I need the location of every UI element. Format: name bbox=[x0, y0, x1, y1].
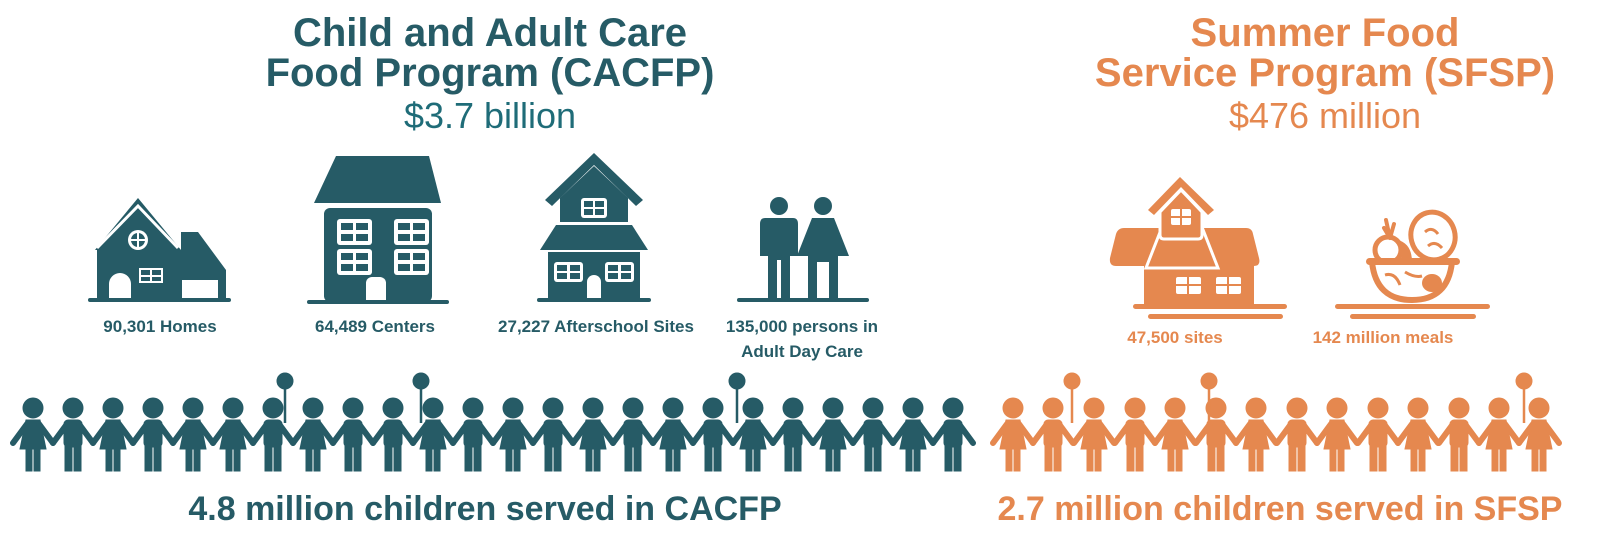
title: SFSP bbox=[1095, 11, 1555, 136]
title: SFSP: Summer Food bbox=[1191, 11, 1459, 55]
title: CACFP: $3.7 billion bbox=[404, 95, 576, 136]
children row: SFSP bbox=[993, 373, 1559, 471]
label: centers: 64,489 Centers bbox=[315, 317, 435, 336]
icon: afterschool bbox=[537, 153, 651, 302]
title: CACFP: Child and Adult Care bbox=[293, 11, 687, 55]
icon: home bbox=[88, 198, 231, 302]
label: adult day care: 135,000 persons in bbox=[726, 317, 878, 336]
icon: salad bowl bbox=[1335, 207, 1490, 319]
caption: CACFP children: 4.8 million children served in CACFP bbox=[188, 490, 782, 528]
title: SFSP: $476 million bbox=[1229, 95, 1421, 136]
label: sites: 47,500 sites bbox=[1127, 328, 1223, 347]
label: meals: 142 million meals bbox=[1313, 328, 1453, 347]
title: CACFP bbox=[266, 11, 714, 136]
icon: centers bbox=[307, 156, 449, 304]
caption: SFSP children: 2.7 million children served in SFSP bbox=[998, 490, 1562, 528]
label: adult day care: Adult Day Care bbox=[741, 342, 863, 361]
label: homes: 90,301 Homes bbox=[103, 317, 217, 336]
children row: CACFP bbox=[13, 373, 973, 471]
icon: SFSP site house bbox=[1110, 177, 1287, 319]
label: adult day care bbox=[726, 317, 878, 361]
title: SFSP: Service Program (SFSP) bbox=[1095, 51, 1555, 95]
icon: adults bbox=[737, 197, 869, 302]
title: CACFP: Food Program (CACFP) bbox=[266, 51, 714, 95]
label: afterschool: 27,227 Afterschool Sites bbox=[498, 317, 694, 336]
